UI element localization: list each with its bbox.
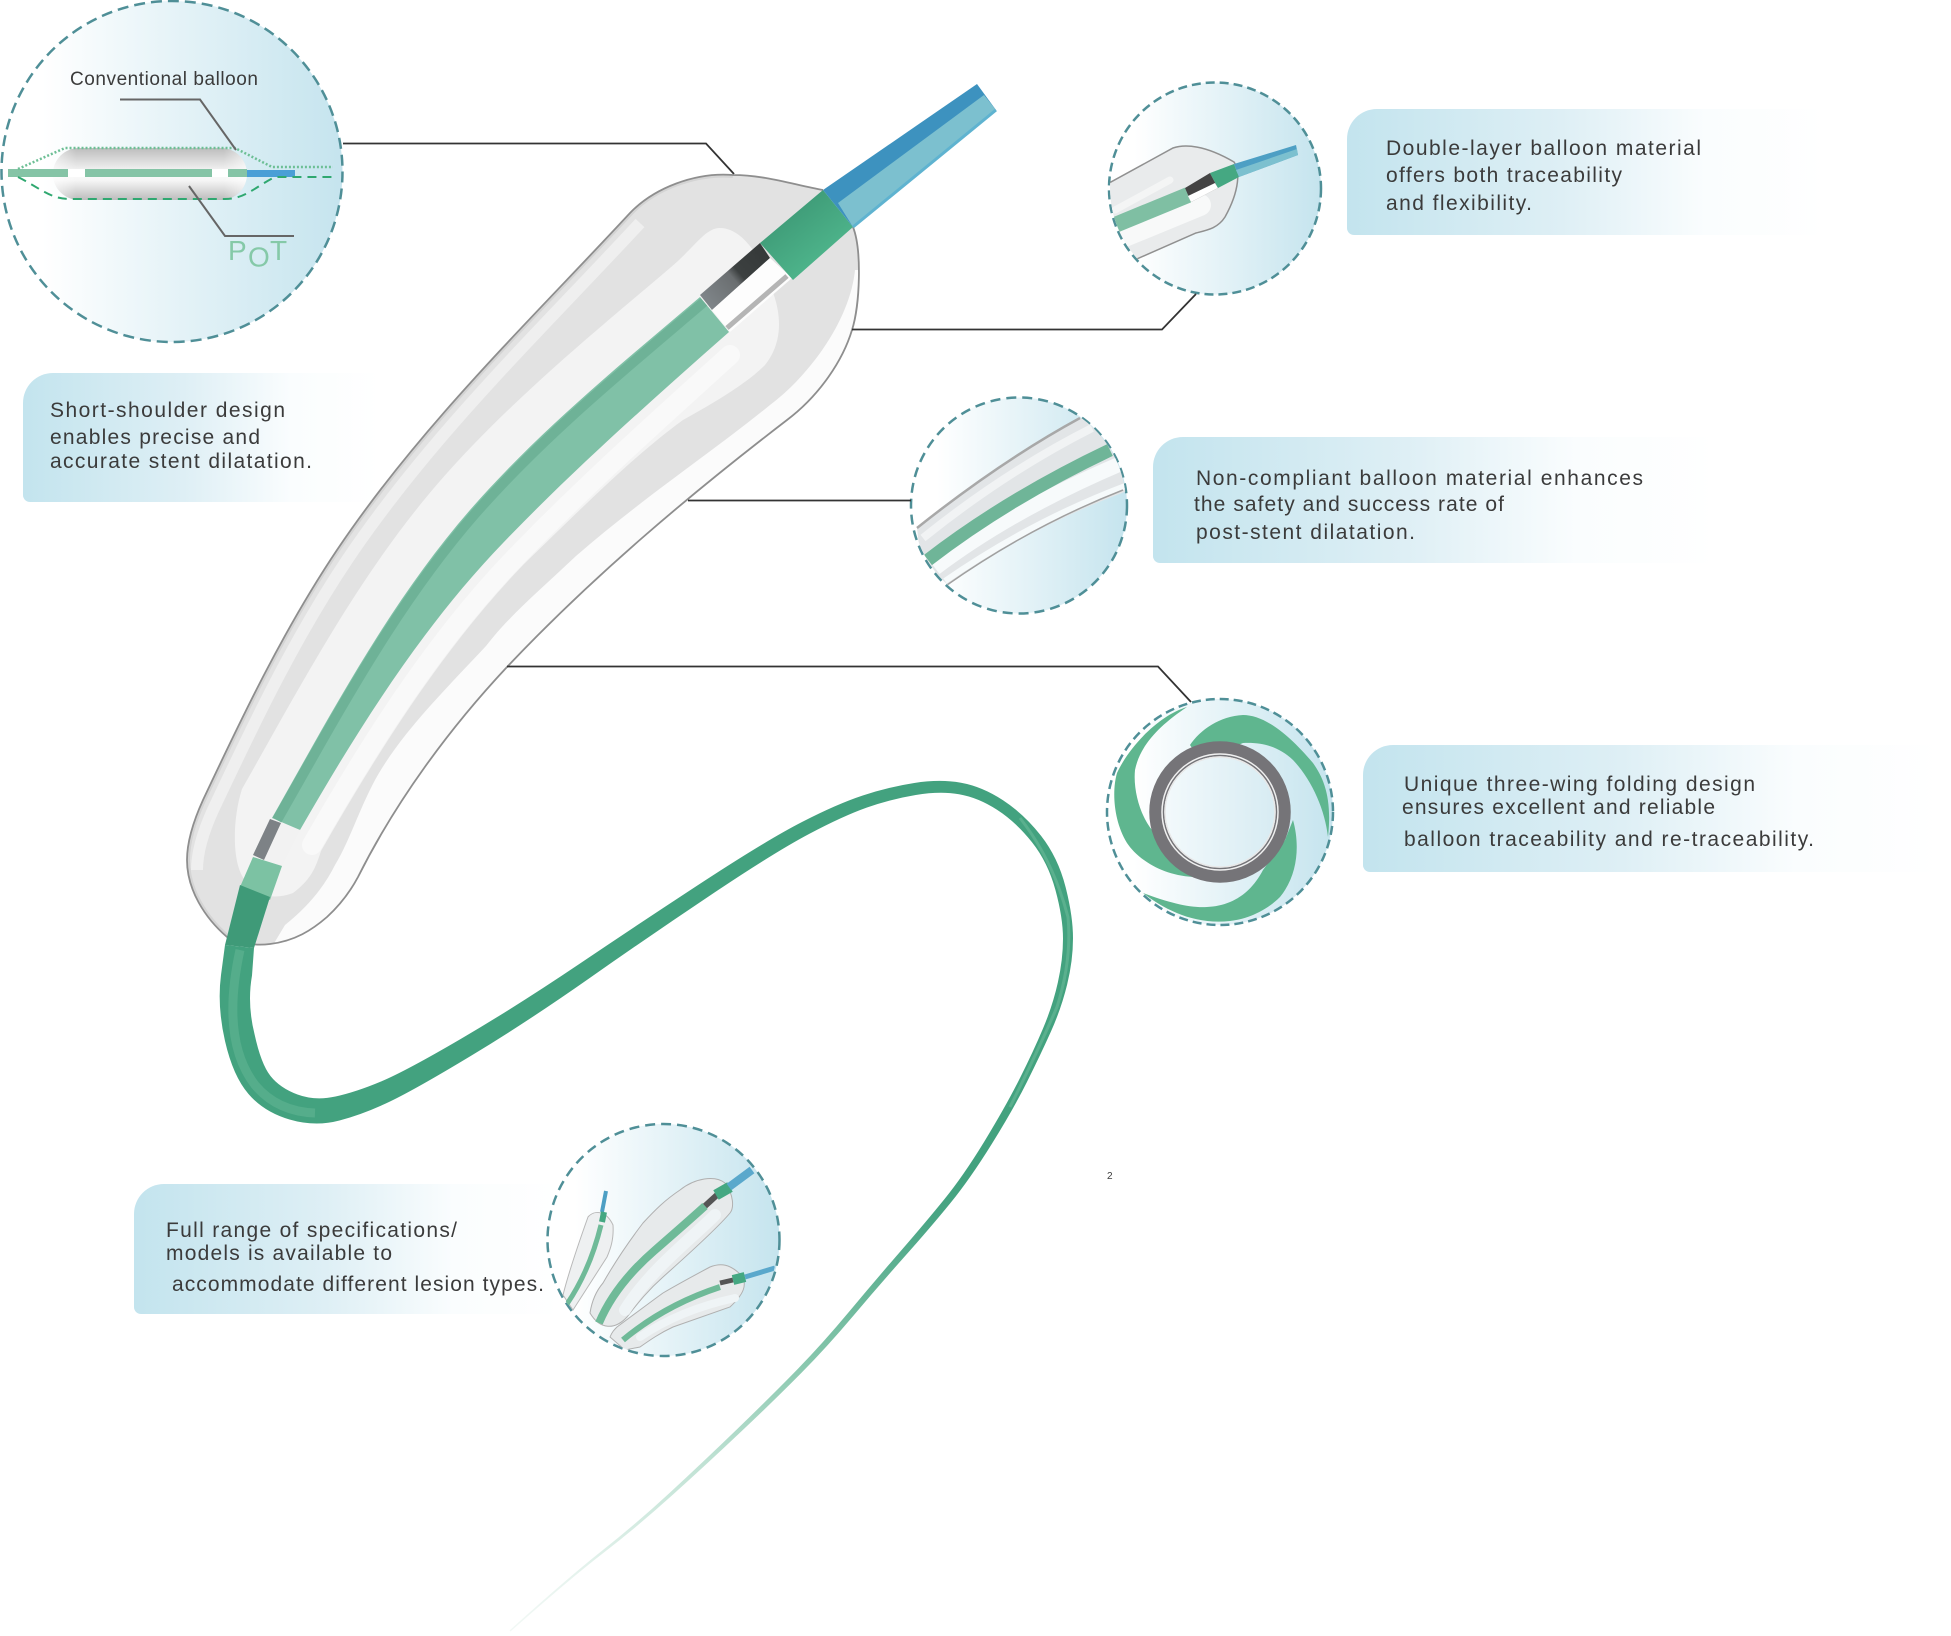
catheter highlight: right curve bbox=[1010, 818, 1069, 1107]
label: conventional balloon: Conventional balloon bbox=[70, 69, 258, 90]
circle background bbox=[2, 1, 342, 342]
callout: three-wing folding: ensures excellent and reliable bbox=[1402, 796, 1715, 819]
label: POT: T bbox=[270, 235, 287, 266]
mini balloon b bbox=[590, 1170, 752, 1326]
label: POT: P bbox=[228, 235, 247, 266]
callout: non-compliant material: post-stent dilatation. bbox=[1196, 521, 1415, 544]
callout: non-compliant material: the safety and success rate of bbox=[1194, 493, 1504, 516]
balloon outline bbox=[187, 175, 859, 945]
inner tube bbox=[272, 297, 729, 830]
capsule balloon bbox=[53, 148, 247, 200]
circle background bbox=[1109, 82, 1321, 294]
callout: short-shoulder design bbox=[23, 373, 380, 502]
panel: range of models circle bbox=[548, 1124, 780, 1356]
catheter highlight: lower curve bbox=[233, 950, 315, 1113]
balloon edge shading bbox=[187, 175, 733, 937]
balloon section bbox=[916, 417, 1126, 585]
callout: short-shoulder design: enables precise and bbox=[50, 426, 260, 449]
mini balloon c bbox=[610, 1265, 775, 1350]
callout: full range of specifications bbox=[134, 1184, 560, 1314]
circle background bbox=[1107, 699, 1333, 925]
circle background bbox=[911, 398, 1127, 614]
callout: short-shoulder design: accurate stent dilatation. bbox=[50, 450, 312, 473]
dotted conventional outline bbox=[18, 148, 333, 169]
callout: three-wing folding: balloon traceability and re-traceability. bbox=[1404, 828, 1814, 851]
tube exit section bbox=[240, 857, 282, 900]
mini balloon a bbox=[563, 1191, 613, 1310]
green sleeve bbox=[760, 190, 853, 280]
label line: conventional balloon bbox=[120, 100, 236, 150]
mini balloon bbox=[1100, 145, 1298, 265]
panel: double-layer material circle bbox=[1100, 82, 1321, 294]
callout: double-layer material bbox=[1347, 109, 1825, 235]
label line: POT bbox=[189, 186, 294, 236]
metal marker: upper bbox=[700, 243, 792, 332]
callout: three-wing folding: Unique three-wing folding design bbox=[1404, 773, 1755, 796]
panel: non-compliant material circle bbox=[911, 398, 1135, 614]
metal marker: lower bbox=[253, 819, 300, 866]
callout: full range of specifications: models is available to bbox=[166, 1242, 392, 1265]
label: POT: O bbox=[248, 242, 270, 272]
balloon body bbox=[187, 175, 859, 945]
main balloon bbox=[187, 84, 996, 950]
dashed POT outline bbox=[18, 177, 333, 199]
small balloons bbox=[563, 1170, 775, 1350]
callout: non-compliant material bbox=[1153, 437, 1717, 563]
callout: short-shoulder design: Short-shoulder design bbox=[50, 399, 285, 422]
leader line: balloon shoulder to material circle bbox=[852, 294, 1196, 330]
wing three bbox=[1143, 820, 1297, 922]
catheter shaft bbox=[8, 169, 295, 177]
catheter ring bbox=[1156, 748, 1284, 876]
leader line: balloon body to folding circle bbox=[507, 666, 1191, 702]
wing one bbox=[1114, 707, 1193, 877]
circle background bbox=[548, 1124, 780, 1356]
callout: full range of specifications: accommodate different lesion types. bbox=[172, 1273, 544, 1296]
leader line: balloon body to non-compliant circle bbox=[688, 500, 911, 502]
panel: three-wing folding circle bbox=[1107, 699, 1333, 925]
callout: non-compliant material: Non-compliant balloon material enhances bbox=[1196, 467, 1643, 490]
page number: 2 bbox=[1107, 1171, 1113, 1182]
blue tip bbox=[823, 84, 996, 227]
panel: conventional balloon versus POT circle bbox=[2, 1, 342, 342]
callout: three-wing folding bbox=[1363, 745, 1940, 872]
catheter shaft curve bbox=[220, 781, 1073, 1632]
callout: full range of specifications: Full range of specifications/ bbox=[166, 1219, 457, 1242]
leader line: POT circle to balloon bbox=[343, 144, 734, 174]
balloon highlights bbox=[197, 223, 900, 950]
callout: double-layer material: Double-layer balloon material bbox=[1386, 137, 1701, 160]
wing two bbox=[1190, 715, 1329, 837]
callout: double-layer material: and flexibility. bbox=[1386, 192, 1532, 215]
callout: double-layer material: offers both traceability bbox=[1386, 164, 1622, 187]
